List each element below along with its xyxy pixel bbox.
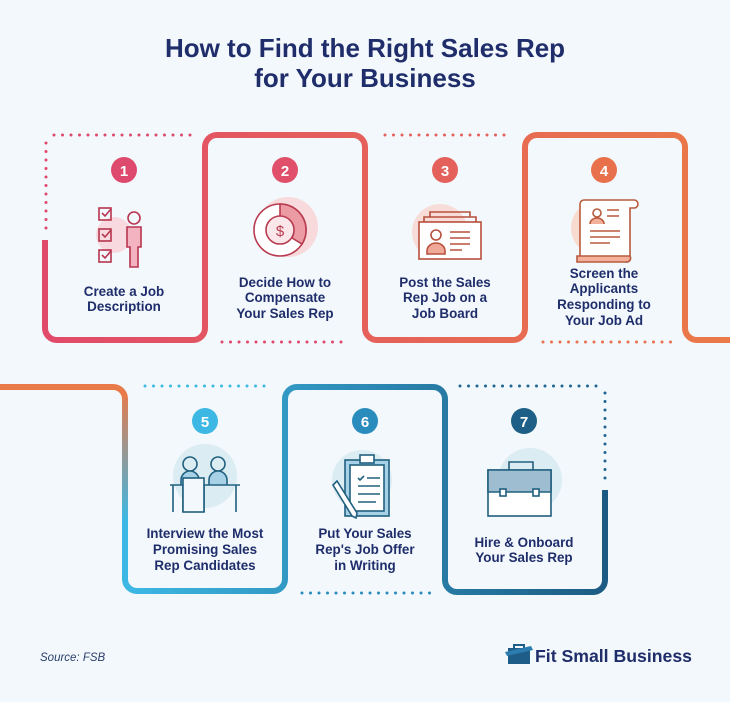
title: for Your Business — [254, 63, 476, 93]
step 2: Your Sales Rep — [236, 306, 334, 321]
step 5: Promising Sales — [153, 542, 257, 557]
icon: briefcase — [488, 448, 562, 516]
step 3: Rep Job on a — [403, 290, 488, 305]
step 3: 3 — [441, 163, 449, 180]
step 1: 1 — [120, 163, 128, 180]
step 2 — [236, 157, 334, 321]
step 1 — [84, 157, 164, 314]
icon: resume scroll — [571, 200, 638, 262]
step 2: 2 — [281, 163, 289, 180]
step 3 — [399, 157, 491, 321]
source: Source: FSB — [40, 652, 106, 664]
bottom path line — [0, 387, 605, 592]
step 6: Rep's Job Offer — [315, 542, 415, 557]
step 6: in Writing — [334, 558, 396, 573]
step 5: Rep Candidates — [154, 558, 256, 573]
step 7 — [475, 408, 573, 565]
step 6: 6 — [361, 414, 369, 431]
icon: dollar donut chart — [254, 197, 318, 257]
top dotted lines — [46, 135, 672, 342]
step 4: Screen the — [570, 266, 638, 281]
step 4: 4 — [600, 163, 609, 180]
step 7: Hire & Onboard — [475, 535, 573, 550]
icon: checklist person — [96, 208, 141, 267]
title: How to Find the Right Sales Rep — [165, 33, 565, 63]
logo: Fit Small Business — [535, 646, 692, 666]
bottom dotted lines — [145, 386, 605, 593]
step 4: Your Job Ad — [565, 313, 643, 328]
icon: interview — [170, 444, 240, 512]
step 5: Interview the Most — [147, 526, 264, 541]
step 2: Decide How to — [239, 275, 331, 290]
icon: clipboard pen — [332, 450, 392, 518]
step 1: Description — [87, 299, 161, 314]
step 3: Post the Sales — [399, 275, 491, 290]
icon: job cards — [412, 204, 481, 260]
step 6: Put Your Sales — [318, 526, 412, 541]
title — [165, 33, 565, 93]
step 6 — [315, 408, 415, 573]
top path line — [45, 135, 730, 340]
step 2: Compensate — [245, 290, 325, 305]
step 7: Your Sales Rep — [475, 550, 573, 565]
step 7: 7 — [520, 414, 528, 431]
step 4 — [557, 157, 651, 328]
step 1: Create a Job — [84, 284, 164, 299]
step 5: 5 — [201, 414, 209, 431]
icon: dollar donut chart: $ — [276, 223, 285, 240]
step 4: Applicants — [570, 281, 638, 296]
step 3: Job Board — [412, 306, 478, 321]
step 4: Responding to — [557, 297, 651, 312]
step 5 — [147, 408, 264, 573]
